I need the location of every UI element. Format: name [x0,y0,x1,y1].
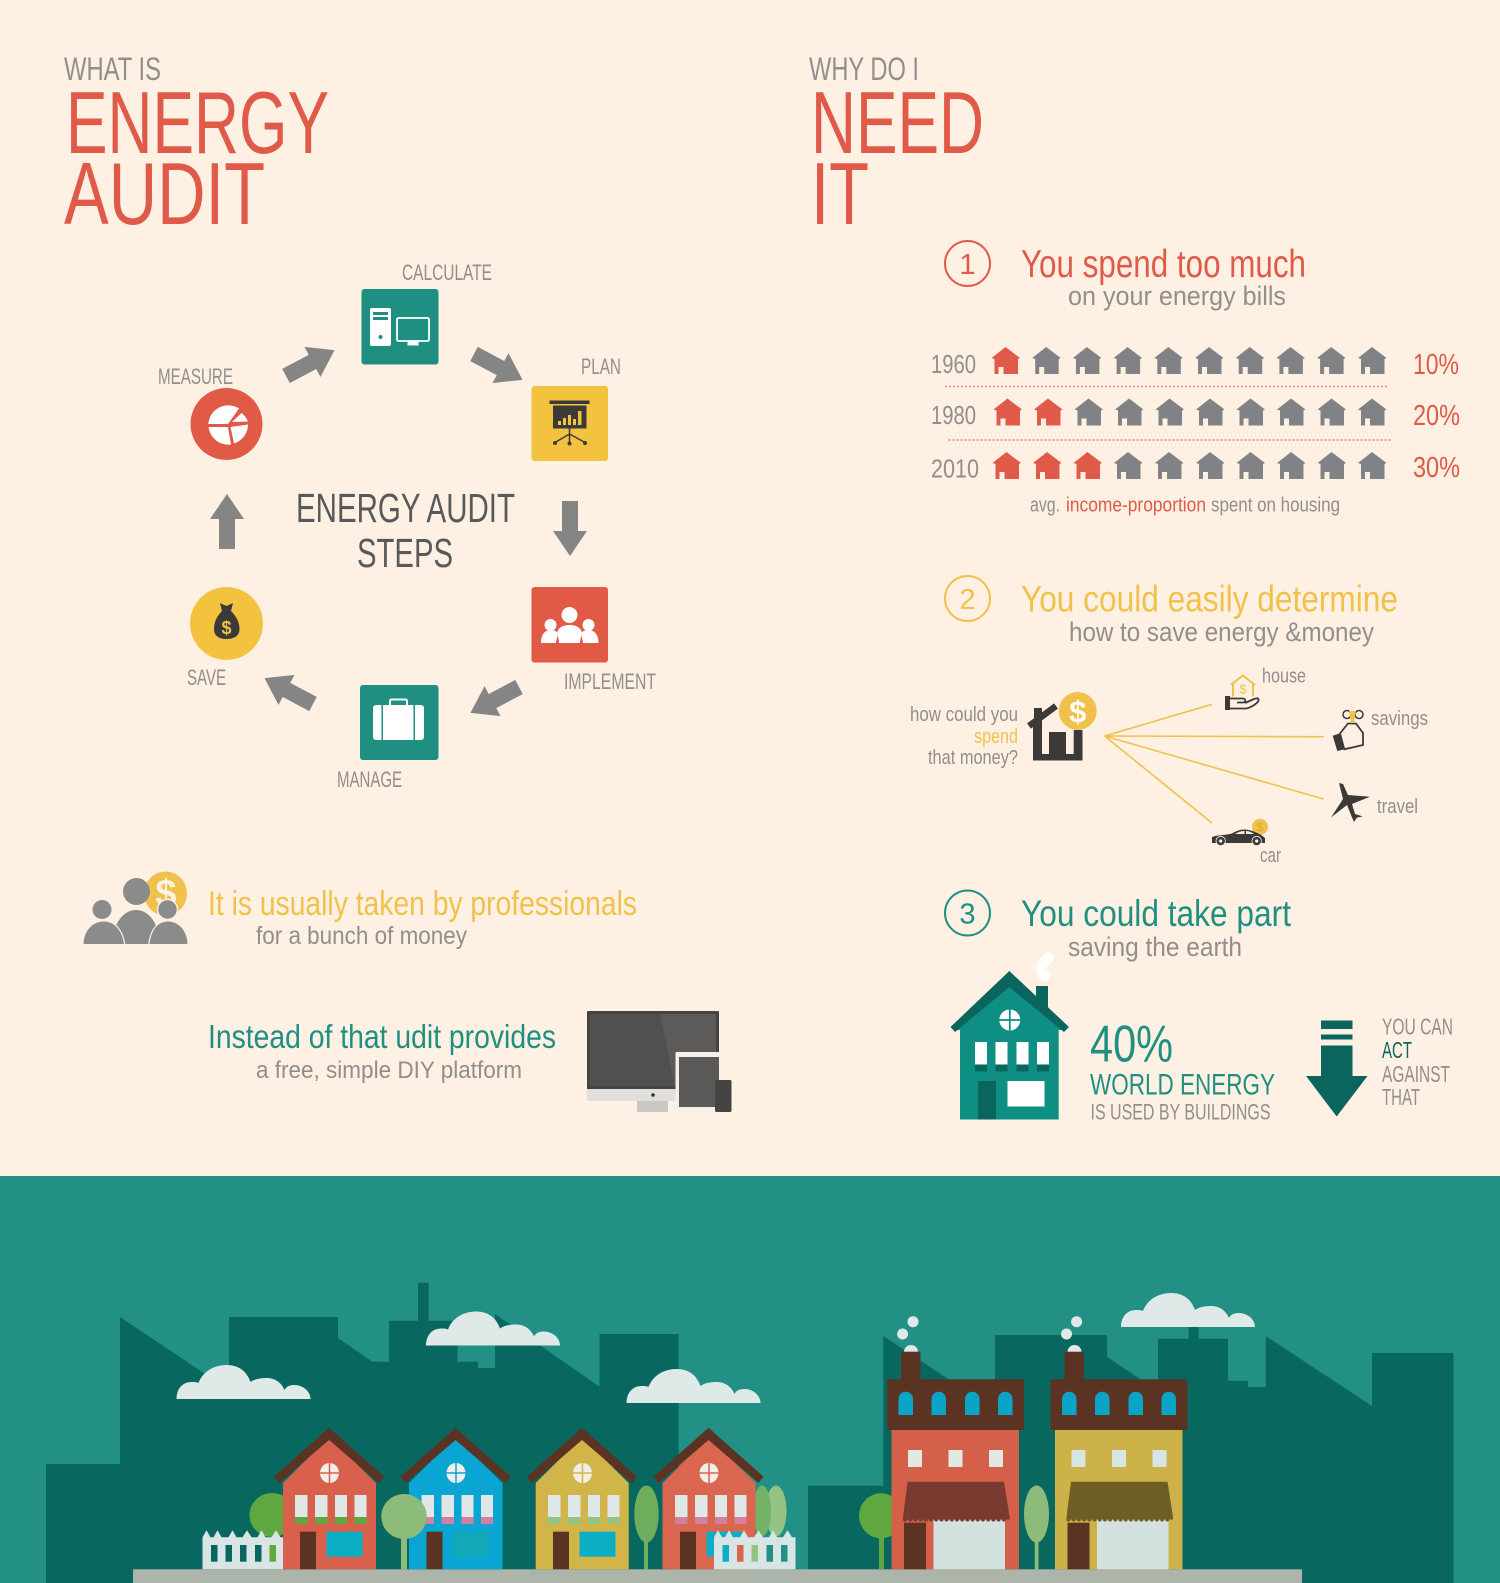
question text: that money? [928,747,1018,769]
option: car: car [1260,845,1281,867]
skyline right [808,1320,1454,1583]
step: save [187,587,263,690]
connector lines [1105,704,1324,823]
title: what is energy audit: AUDIT [64,144,265,243]
ground [133,1569,1302,1583]
tree behind house 4 [753,1486,786,1536]
step: save: $ [221,618,232,638]
icon: teal house with smoke [950,952,1069,1120]
option: house [1225,666,1306,710]
callout: usually taken by professionals: It is usually taken by professionals [208,885,637,923]
step: plan [532,354,621,461]
callout: usually taken by professionals: for a bunch of money [256,922,467,950]
title: why do I need it: WHY DO I [809,51,919,87]
row 2010: 30% [1413,452,1460,484]
row 1960: 1960 [931,349,976,379]
shop 2 yellow [1050,1316,1188,1569]
chart: income proportion spent on housing [931,347,1460,516]
step: implement: IMPLEMENT [564,669,656,694]
section 2: you could easily determine: You could easily determine [1021,578,1398,620]
callout: you can act against that: ACT [1382,1037,1412,1063]
title: why do I need it: NEED [811,73,984,172]
title: what is energy audit: ENERGY [66,73,329,172]
house 4 red [654,1428,764,1569]
section 3: you could take part: saving the earth [1068,932,1242,962]
callout: you can act against that [1382,1014,1453,1110]
row 1980: 1980 [931,400,976,430]
teal background band [0,1176,1500,1583]
icon: people with dollar coin [80,872,190,947]
row 1960: 10% [1413,349,1459,381]
house 3 yellow [527,1428,637,1569]
arrow: plan to implement [553,501,587,556]
title: why do I need it [809,51,984,243]
step: plan: PLAN [581,354,621,379]
arrow: measure to calculate [278,335,343,391]
stat: 40% world energy [1090,1016,1275,1124]
option: travel [1331,783,1418,822]
cloud 2 [426,1312,560,1346]
title: what is energy audit: WHAT IS [64,51,161,87]
fence left [202,1530,284,1569]
section 2: you could easily determine: how to save energy &money [1069,617,1374,647]
arrow: save to measure [210,494,244,549]
stat: 40% world energy: IS USED BY BUILDINGS [1090,1100,1270,1124]
fence right [714,1530,796,1569]
section 2: you could easily determine [945,576,1398,647]
tree left of shop 1 [859,1493,903,1569]
tree between houses 3 and 4 [634,1486,659,1569]
number badge 1 [945,241,990,286]
page background [0,0,1500,1176]
option: car: $ [1257,820,1264,834]
option: travel: travel [1377,796,1418,818]
icon: people with dollar coin: $ [155,873,177,915]
number badge 3 [945,890,990,936]
number badge 2 [945,576,990,621]
title: why do I need it: IT [811,144,869,243]
heading: energy audit steps [296,485,515,576]
callout: free DIY platform [208,1011,732,1112]
arrow: manage to save [256,663,321,719]
row 1960 [931,347,1459,381]
stat: 40% world energy: WORLD ENERGY [1090,1068,1275,1102]
section 3: you could take part [945,890,1292,962]
number badge 3: 3 [959,898,976,930]
step: measure: MEASURE [158,364,233,389]
step: measure [158,364,262,460]
icon: house with dollar coin [1029,692,1097,760]
stat: 40% world energy: 40% [1090,1016,1173,1074]
question text [910,704,1018,769]
row 2010: 2010 [931,454,979,484]
number badge 1: 1 [959,249,976,281]
question text: how could you [910,704,1018,726]
section 1: you spend too much: on your energy bills [1068,281,1286,311]
house 1 red [274,1428,384,1569]
option: house: $ [1239,682,1247,696]
callout: you can act against that: YOU CAN [1382,1014,1453,1040]
arrow: down with bars [1306,1020,1368,1116]
cloud 4 [1121,1293,1255,1327]
title: what is energy audit [64,51,329,243]
house 2 blue [400,1428,510,1569]
panel: city scene [0,1176,1500,1583]
callout: free DIY platform: a free, simple DIY platform [256,1057,522,1084]
step: calculate [362,260,492,364]
chart caption: spent on housing [1211,494,1340,516]
number badge 2: 2 [959,584,976,616]
section 1: you spend too much: You spend too much [1021,243,1306,286]
chart caption [1030,494,1340,516]
callout: free DIY platform: Instead of that udit provides [208,1018,556,1055]
arrow: implement to manage [462,672,527,728]
icon: monitor tablet and phone [587,1011,732,1112]
question text: spend [974,726,1018,748]
heading: energy audit steps: STEPS [357,530,453,576]
callout: usually taken by professionals [80,872,637,950]
skyline left [46,1283,679,1583]
section 3: you could take part: You could take part [1021,893,1292,934]
tree left of fence [250,1493,294,1537]
heading: energy audit steps: ENERGY AUDIT [296,485,515,531]
option: car [1212,819,1281,867]
tree between shops [1024,1486,1049,1569]
chart caption: income-proportion [1066,494,1206,516]
chart caption: avg. [1030,494,1060,516]
step: manage: MANAGE [337,767,402,792]
icon: house with dollar coin: $ [1069,694,1086,729]
diagram: energy audit steps cycle [158,260,656,792]
arrow: calculate to plan [466,339,531,395]
shop 1 red [887,1316,1024,1569]
step: manage [337,685,438,792]
step: implement [532,587,656,694]
row 1980 [931,398,1460,432]
option: savings: savings [1371,708,1428,730]
option: savings [1333,708,1428,751]
cloud 1 [176,1365,310,1399]
row 1980: 20% [1413,400,1460,432]
diagram: how could you spend that money [910,666,1428,867]
callout: you can act against that: THAT [1382,1084,1420,1110]
cloud 3 [626,1369,760,1403]
row 2010 [931,452,1460,484]
tree between houses 1 and 2 [381,1494,427,1569]
step: save: SAVE [187,665,226,690]
option: house: house [1262,666,1306,688]
step: calculate: CALCULATE [402,260,492,285]
callout: you can act against that: AGAINST [1382,1061,1450,1087]
section 1: you spend too much [945,241,1306,311]
